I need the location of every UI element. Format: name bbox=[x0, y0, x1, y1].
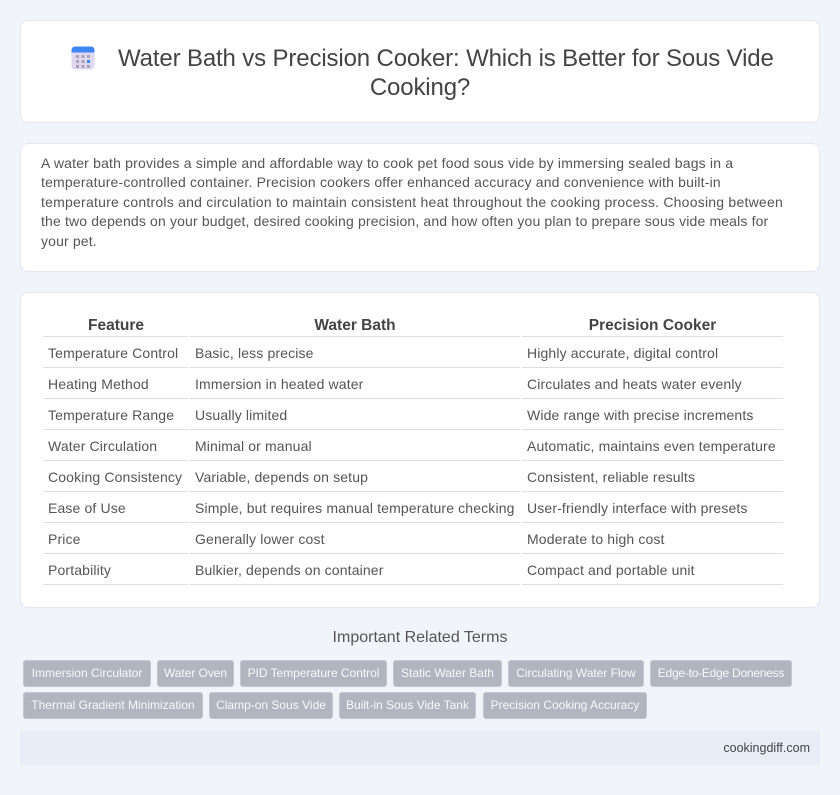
title: Water Bath vs Precision Cooker: Which is Better for Sous Vide bbox=[118, 45, 774, 72]
comparison table: Basic, less precise bbox=[195, 345, 314, 361]
tag bbox=[23, 660, 151, 687]
comparison table: Ease of Use bbox=[48, 500, 126, 516]
comparison table: Generally lower cost bbox=[195, 531, 325, 547]
comparison table: Water Circulation bbox=[48, 438, 157, 454]
heading: related terms: Important Related Terms bbox=[333, 629, 507, 646]
table header: Feature: Feature bbox=[88, 317, 144, 334]
comparison table bbox=[43, 317, 783, 585]
text block: introduction: A water bath provides a simple and affordable way to cook pet food sous vide by immersing sealed bags in a bbox=[41, 155, 733, 171]
comparison table: Immersion in heated water bbox=[195, 376, 363, 392]
comparison table: Usually limited bbox=[195, 407, 287, 423]
text block: introduction bbox=[41, 155, 783, 249]
comparison table: Temperature Range bbox=[48, 407, 174, 423]
text block: introduction: your pet. bbox=[41, 233, 97, 249]
text block: introduction: temperature-controlled container. Precision cookers offer enhanced accuracy and convenience with built-in bbox=[41, 174, 721, 190]
title: Cooking? bbox=[370, 74, 470, 101]
comparison table: Automatic, maintains even temperature bbox=[527, 438, 776, 454]
text block: introduction: the two depends on your budget, desired cooking precision, and how often you plan to prepare sous vide meals for bbox=[41, 213, 768, 229]
comparison table: Temperature Control bbox=[48, 345, 178, 361]
panel: comparison table card bbox=[20, 292, 820, 608]
tag bbox=[157, 660, 234, 687]
comparison table: Bulkier, depends on container bbox=[195, 562, 384, 578]
tag: Circulating Water Flow bbox=[516, 666, 636, 680]
tag bbox=[240, 660, 387, 687]
tag bbox=[508, 660, 644, 687]
text block: introduction: temperature controls and circulation to maintain consistent heat throughout the cooking process. Choosing between bbox=[41, 194, 783, 210]
comparison table: Minimal or manual bbox=[195, 438, 312, 454]
comparison table: Consistent, reliable results bbox=[527, 469, 695, 485]
tag: Thermal Gradient Minimization bbox=[31, 698, 195, 712]
comparison table: Compact and portable unit bbox=[527, 562, 695, 578]
footer bar bbox=[20, 731, 820, 765]
tag: Static Water Bath bbox=[401, 666, 494, 680]
tag: Clamp-on Sous Vide bbox=[216, 698, 326, 712]
tag bbox=[23, 692, 203, 719]
comparison table: Heating Method bbox=[48, 376, 149, 392]
footer: site name: cookingdiff.com bbox=[723, 741, 810, 755]
comparison table: Highly accurate, digital control bbox=[527, 345, 718, 361]
comparison table: Moderate to high cost bbox=[527, 531, 665, 547]
title bbox=[118, 45, 774, 101]
comparison table: Portability bbox=[48, 562, 111, 578]
tag: PID Temperature Control bbox=[248, 666, 379, 680]
tag: Precision Cooking Accuracy bbox=[491, 698, 639, 712]
tag: Edge-to-Edge Doneness bbox=[658, 666, 784, 680]
tag bbox=[339, 692, 476, 719]
tag: Immersion Circulator bbox=[32, 666, 142, 680]
tag: Built-in Sous Vide Tank bbox=[346, 698, 469, 712]
comparison table: User-friendly interface with presets bbox=[527, 500, 748, 516]
panel: title card bbox=[20, 20, 820, 123]
comparison table: Price bbox=[48, 531, 81, 547]
icon: calendar bbox=[72, 46, 94, 70]
tag: Water Oven bbox=[164, 666, 227, 680]
table header: Water Bath: Water Bath bbox=[314, 317, 396, 334]
comparison table: Variable, depends on setup bbox=[195, 469, 368, 485]
table header: Precision Cooker: Precision Cooker bbox=[589, 317, 716, 334]
tag bbox=[209, 692, 333, 719]
comparison table: Simple, but requires manual temperature checking bbox=[195, 500, 515, 516]
comparison table: Circulates and heats water evenly bbox=[527, 376, 742, 392]
panel: introduction card bbox=[20, 143, 820, 272]
tag bbox=[393, 660, 502, 687]
tag bbox=[483, 692, 647, 719]
comparison table: Cooking Consistency bbox=[48, 469, 182, 485]
comparison table: Wide range with precise increments bbox=[527, 407, 754, 423]
tag bbox=[650, 660, 792, 687]
